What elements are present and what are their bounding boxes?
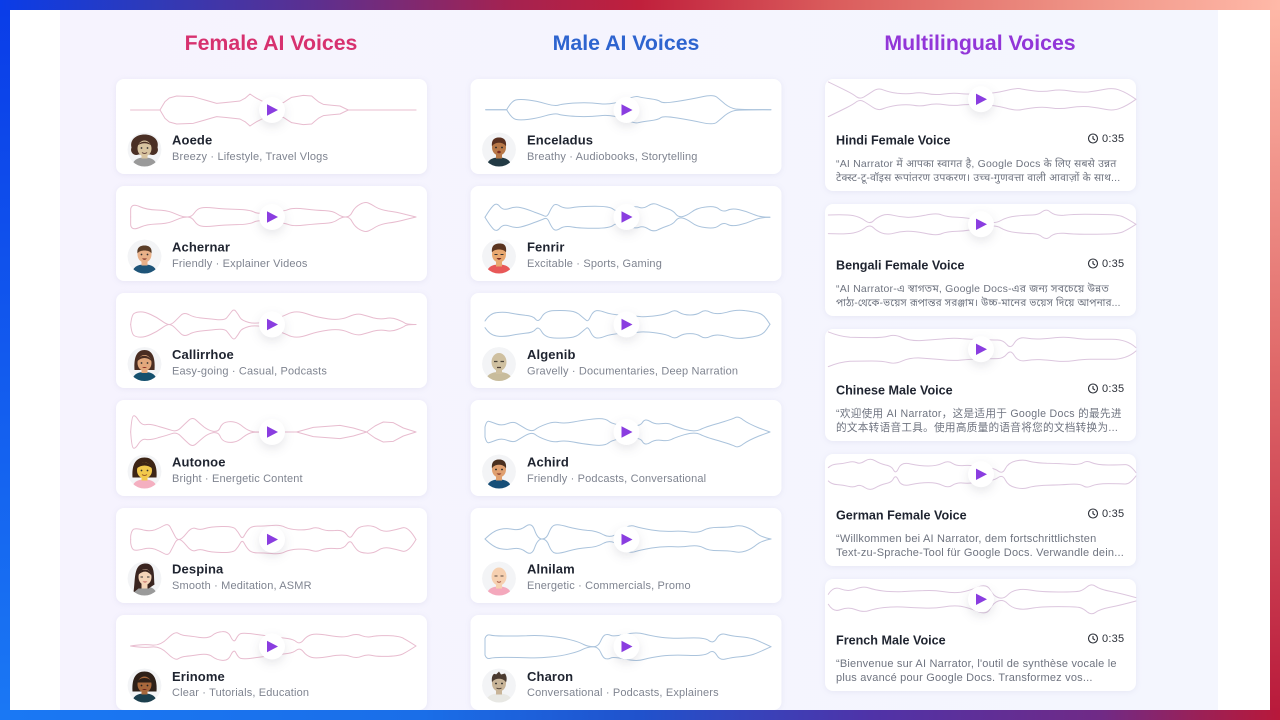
play button xyxy=(259,526,285,552)
avatar: Algenib xyxy=(482,347,516,381)
card: Charon xyxy=(470,615,782,710)
voice description: Smooth · Meditation, ASMR xyxy=(172,580,312,592)
card: Achernar xyxy=(116,186,427,281)
voice description: Friendly · Explainer Videos xyxy=(172,258,308,270)
avatar: Achird xyxy=(482,454,516,488)
panel: male voices column xyxy=(470,79,782,710)
voice description: Friendly · Podcasts, Conversational xyxy=(527,473,706,485)
voice name: Chinese Male Voice xyxy=(836,384,953,398)
waveform xyxy=(131,416,416,448)
waveform xyxy=(131,310,416,339)
waveform xyxy=(485,525,771,553)
voice name: Charon xyxy=(527,669,573,684)
play button xyxy=(259,419,285,445)
clock icon xyxy=(1088,259,1098,268)
avatar: Aoede xyxy=(128,132,162,166)
voice name: Enceladus xyxy=(527,132,593,148)
voice name: Alnilam xyxy=(527,562,575,576)
card: Algenib xyxy=(470,293,782,388)
play button xyxy=(259,634,285,660)
quote text: “Willkommen bei AI Narrator, dem fortschrittlichsten xyxy=(836,533,1096,545)
quote text: পাঠ্য-থেকে-ভয়েস রূপান্তর সরঞ্জাম। উচ্চ-মানের ভয়েস দিয়ে আপনার... xyxy=(836,297,1121,309)
card: Despina xyxy=(116,508,427,603)
voice name: Achernar xyxy=(172,240,230,254)
card: Fenrir xyxy=(470,186,782,281)
quote text: “AI Narrator-এ স্বাগতম, Google Docs-এর জন্য সবচেয়ে উন্নত xyxy=(836,282,1109,295)
clock icon xyxy=(1088,384,1098,393)
play button xyxy=(614,312,640,338)
waveform xyxy=(485,204,770,231)
waveform xyxy=(131,525,416,554)
card: Bengali Female Voice xyxy=(825,204,1136,316)
waveform xyxy=(131,94,416,126)
voice description: Breezy · Lifestyle, Travel Vlogs xyxy=(172,151,328,163)
play button xyxy=(614,526,640,552)
card: Enceladus xyxy=(470,79,782,174)
heading: Multilingual Voices: Multilingual Voices xyxy=(884,31,1076,55)
avatar: Fenrir xyxy=(482,240,516,274)
duration: 0:35 xyxy=(1102,258,1124,270)
voice description: Excitable · Sports, Gaming xyxy=(527,258,662,270)
card: Chinese Male Voice xyxy=(825,329,1136,441)
duration: 0:35 xyxy=(1102,133,1124,145)
voice name: Erinome xyxy=(172,669,225,684)
avatar: Alnilam xyxy=(482,562,516,596)
waveform xyxy=(485,310,770,338)
card: Achird xyxy=(470,400,782,496)
card: Callirrhoe xyxy=(116,293,427,388)
quote text: plus avancé pour Google Docs. Transformez vos... xyxy=(836,672,1093,684)
quote text: टेक्स्ट-टू-वॉइस रूपांतरण उपकरण। उच्च-गुणवत्ता वाली आवाज़ों के साथ... xyxy=(836,171,1120,185)
waveform xyxy=(828,459,1136,489)
panel: female voices column xyxy=(116,79,427,710)
avatar: Achernar xyxy=(128,240,162,274)
panel: multilingual voices column xyxy=(825,79,1136,691)
voice name: Aoede xyxy=(172,132,212,148)
voice name: Callirrhoe xyxy=(172,347,234,362)
waveform xyxy=(485,417,770,447)
voice description: Bright · Energetic Content xyxy=(172,473,303,485)
voice description: Conversational · Podcasts, Explainers xyxy=(527,687,719,699)
duration: 0:35 xyxy=(1102,383,1124,395)
voice description: Energetic · Commercials, Promo xyxy=(527,580,691,592)
clock icon xyxy=(1088,634,1098,643)
voice name: Algenib xyxy=(527,347,576,362)
duration: 0:35 xyxy=(1102,633,1124,645)
play button xyxy=(968,461,994,487)
play button xyxy=(968,86,994,112)
play button xyxy=(259,97,285,123)
quote text: “Bienvenue sur AI Narrator, l'outil de synthèse vocale le xyxy=(836,658,1117,670)
quote text: 的文本转语音工具。使用高质量的语音将您的文档转换为... xyxy=(836,421,1118,434)
play button xyxy=(614,204,640,230)
voice name: Despina xyxy=(172,562,224,576)
waveform xyxy=(131,203,416,231)
play button xyxy=(259,312,285,338)
voice description: Clear · Tutorials, Education xyxy=(172,687,309,699)
quote text: Text-zu-Sprache-Tool für Google Docs. Verwandle dein... xyxy=(836,547,1124,559)
play button xyxy=(614,634,640,660)
play button xyxy=(968,211,994,237)
play button xyxy=(259,204,285,230)
avatar: Enceladus xyxy=(482,132,516,166)
voice description: Gravelly · Documentaries, Deep Narration xyxy=(527,366,738,378)
avatar: Callirrhoe xyxy=(128,347,162,381)
play button xyxy=(968,586,994,612)
clock icon xyxy=(1088,509,1098,518)
avatar: Autonoe xyxy=(128,454,162,488)
card: Hindi Female Voice xyxy=(825,79,1136,191)
waveform xyxy=(828,585,1136,614)
voice description: Easy-going · Casual, Podcasts xyxy=(172,366,327,378)
quote text: “AI Narrator में आपका स्वागत है, Google Docs के लिए सबसे उन्नत xyxy=(836,157,1117,170)
card: French Male Voice xyxy=(825,579,1136,691)
waveform xyxy=(485,633,771,660)
waveform xyxy=(828,332,1136,367)
duration: 0:35 xyxy=(1102,508,1124,520)
voice name: Bengali Female Voice xyxy=(836,258,965,272)
waveform xyxy=(131,632,416,660)
waveform xyxy=(828,210,1136,238)
voice name: Autonoe xyxy=(172,454,226,470)
voice name: French Male Voice xyxy=(836,634,946,648)
voice description: Breathy · Audiobooks, Storytelling xyxy=(527,151,698,163)
avatar: Erinome xyxy=(128,668,162,702)
clock icon xyxy=(1088,134,1098,143)
heading: Female AI Voices: Female AI Voices xyxy=(185,31,357,55)
voice name: Fenrir xyxy=(527,240,565,254)
play button xyxy=(968,336,994,362)
waveform xyxy=(486,96,771,124)
play button xyxy=(614,97,640,123)
voice name: German Female Voice xyxy=(836,508,967,522)
card: German Female Voice xyxy=(825,454,1136,566)
quote text: “欢迎使用 AI Narrator，这是适用于 Google Docs 的最先进 xyxy=(836,407,1122,420)
avatar: Despina xyxy=(128,562,162,596)
play button xyxy=(614,419,640,445)
card: Erinome xyxy=(116,615,427,710)
heading: Male AI Voices: Male AI Voices xyxy=(553,31,699,55)
card: Alnilam xyxy=(470,508,782,603)
avatar: Charon xyxy=(482,668,516,702)
voice name: Hindi Female Voice xyxy=(836,134,951,148)
card: Autonoe xyxy=(116,400,427,496)
card: Aoede xyxy=(116,79,427,174)
waveform xyxy=(828,82,1136,117)
voice name: Achird xyxy=(527,454,569,470)
